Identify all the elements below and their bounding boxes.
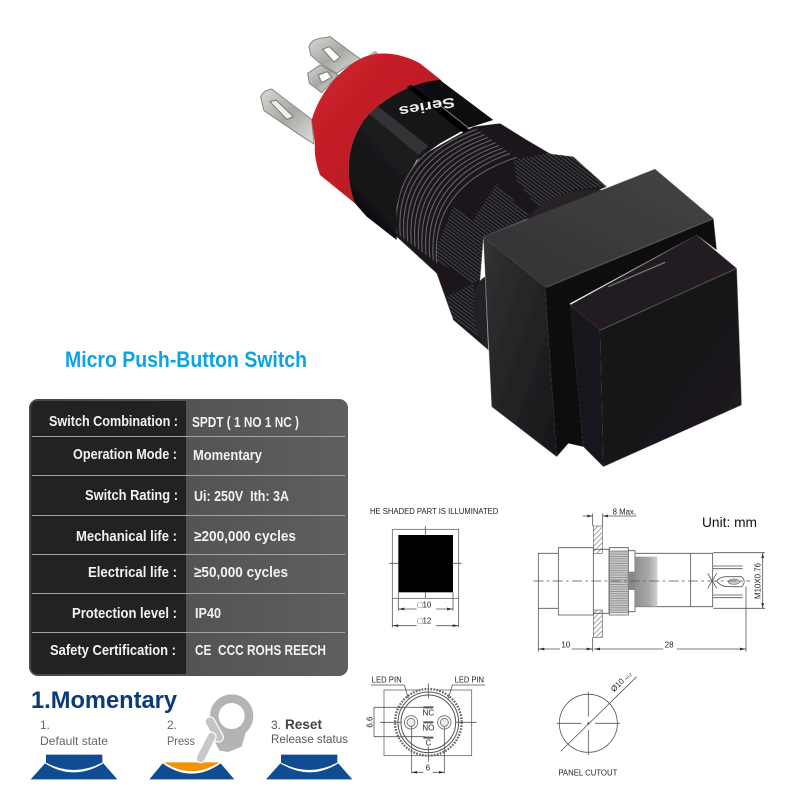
diagram: rear view with LED pins: NO <box>422 724 434 733</box>
product photo: push-button switch <box>261 37 742 467</box>
diagram: side dimensions: 10 <box>561 641 571 650</box>
row: mechanical life <box>76 528 296 545</box>
step 1 text: Default state <box>40 734 108 748</box>
unit label: Unit: mm <box>702 514 757 530</box>
row: mechanical life: ≥200,000 cycles <box>194 528 296 545</box>
row: electrical life: Electrical life : <box>88 564 177 581</box>
row: protection level: IP40 <box>195 605 221 622</box>
icon: pressing hand <box>201 699 249 758</box>
diagram: side dimensions: 28 <box>665 641 674 650</box>
row: switch combination <box>49 413 299 431</box>
diagram: rear view with LED pins: 6.6 <box>365 716 374 728</box>
diagram: side dimensions <box>533 508 765 652</box>
row: electrical life: ≥50,000 cycles <box>194 564 288 581</box>
step 2 text: 2. <box>167 718 177 732</box>
icon: pressed button <box>149 762 234 779</box>
LED pin labels: LED PIN <box>455 675 484 684</box>
threaded collar <box>396 123 607 350</box>
title: Micro Push-Button Switch <box>65 347 307 372</box>
step 3 text: Release status <box>271 732 348 746</box>
caption: HE SHADED PART IS ILLUMINATED <box>370 507 499 516</box>
series marking: Series <box>397 94 456 120</box>
row: operation mode: Operation Mode : <box>73 446 177 463</box>
row: switch rating: Ui: 250V Ith: 3A <box>194 488 289 505</box>
row: switch combination: Switch Combination : <box>49 413 178 430</box>
diagram: rear view with LED pins <box>365 675 485 774</box>
square button cap <box>570 235 742 467</box>
icon: reset button <box>266 755 352 779</box>
row: safety certification <box>50 642 326 659</box>
row: switch rating: Switch Rating : <box>85 487 178 504</box>
diagram: side dimensions: M10X0.76 <box>754 562 763 599</box>
row: switch rating <box>85 487 289 505</box>
momentary heading: 1.Momentary <box>31 687 178 714</box>
step 3 text: Reset <box>285 717 322 732</box>
row: operation mode <box>73 446 263 464</box>
row: safety certification: CE CCC ROHS REECH <box>195 642 326 659</box>
diagram: side dimensions: 8 Max. <box>613 508 636 517</box>
row: operation mode: Momentary <box>193 447 263 464</box>
black body <box>349 80 507 240</box>
diagram: rear view with LED pins: NC <box>423 709 434 718</box>
step 1 text: 1. <box>40 718 50 732</box>
diagram: rear view with LED pins: 6 <box>426 763 431 772</box>
step 2 text: Press <box>167 734 195 748</box>
row: safety certification: Safety Certification : <box>50 642 176 659</box>
row: protection level: Protection level : <box>72 605 177 622</box>
row: electrical life <box>88 564 288 581</box>
diagram: rear view with LED pins: C <box>425 739 431 748</box>
diagram: illuminated shaded part <box>370 507 499 627</box>
row: switch combination: SPDT ( 1 NO 1 NC ) <box>192 414 299 431</box>
step 1 text <box>40 718 108 748</box>
square housing <box>483 169 717 457</box>
dimension lines <box>538 513 765 652</box>
diagram: illuminated shaded part: □12 <box>418 616 432 625</box>
icon: default state button <box>31 755 117 779</box>
row: mechanical life: Mechanical life : <box>76 528 177 545</box>
LED pin labels: LED PIN <box>372 675 402 684</box>
diagram: panel cutout: +0.2 <box>624 671 633 681</box>
diagram: illuminated shaded part: □10 <box>418 600 432 609</box>
red end cap <box>312 53 442 203</box>
diagram: panel cutout <box>557 671 637 778</box>
terminals <box>261 37 380 144</box>
diagram: panel cutout: Ø10 <box>609 676 626 694</box>
LED pin labels <box>371 675 485 685</box>
step 3 text: 3. <box>271 718 281 732</box>
diagram: panel cutout: PANEL CUTOUT <box>558 769 617 778</box>
panel: specifications table <box>29 399 348 676</box>
step 3 text <box>271 717 348 746</box>
step 2 text <box>167 718 195 748</box>
